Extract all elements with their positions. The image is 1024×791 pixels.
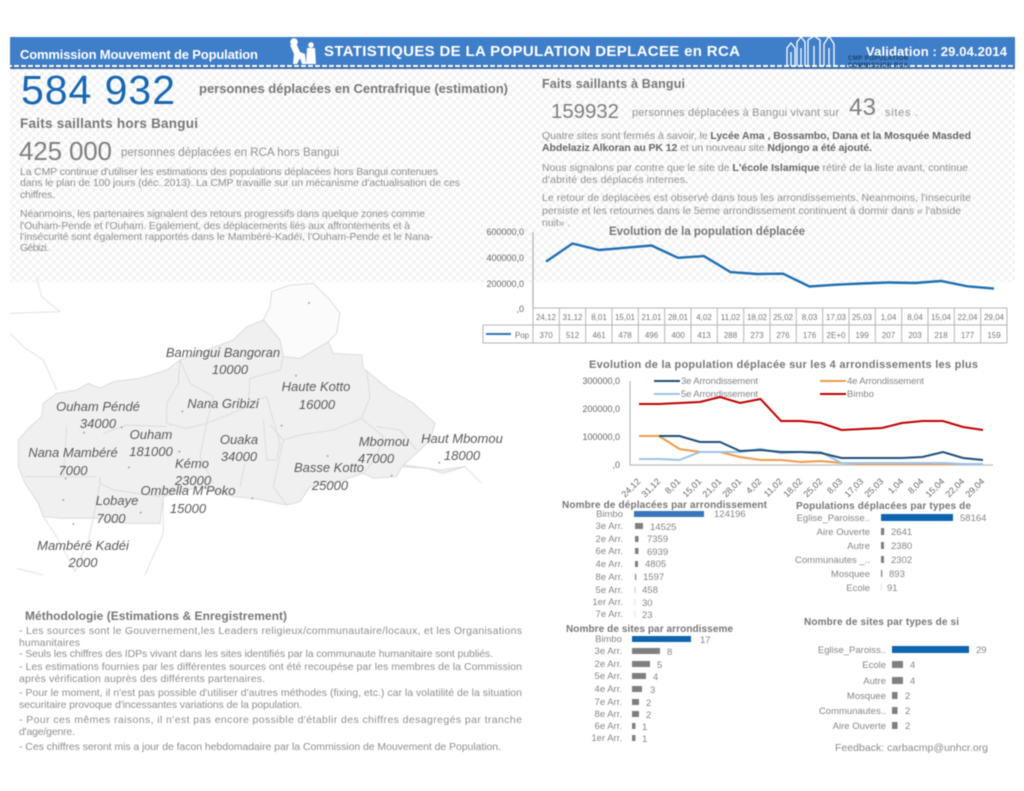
small logo caption xyxy=(848,56,909,69)
labels: 7359 xyxy=(647,534,668,545)
body text xyxy=(20,166,460,254)
date axis labels: 8,04 xyxy=(906,476,925,496)
map labels: 34000 xyxy=(80,416,117,431)
map labels: 16000 xyxy=(299,397,336,412)
bar chart: déplacées par arrondissement xyxy=(562,500,768,621)
labels: Ecole xyxy=(846,583,870,594)
body text: - Pour le moment, il n'est pas possible d'utiliser d'autres méthodes (fixing, etc.) car la volatilité de la situation xyxy=(19,687,522,699)
labels: 17 xyxy=(700,635,711,646)
date axis labels: 1,04 xyxy=(886,476,905,496)
map labels: Kémo xyxy=(175,456,209,471)
labels: 91 xyxy=(887,583,898,594)
labels: 1er Arr. xyxy=(592,597,623,608)
labels: 893 xyxy=(889,569,905,580)
labels: Bimbo xyxy=(595,634,622,645)
labels: Eglise_Paroisse.. xyxy=(797,513,870,524)
line: 4e arrondissement xyxy=(639,436,983,464)
labels: 2380 xyxy=(891,541,912,552)
main title: STATISTIQUES DE LA POPULATION DEPLACEE en RCA xyxy=(324,43,740,60)
panel: méthodologie xyxy=(19,609,522,753)
chart title: Evolution de la population déplacée xyxy=(609,226,805,238)
data table: 400 xyxy=(671,331,685,340)
labels: 58164 xyxy=(960,513,986,524)
data table: 28,01 xyxy=(668,313,689,322)
body text xyxy=(542,130,971,229)
map labels: 15000 xyxy=(170,501,207,516)
chart title: Nombre de déplacées par arrondissement xyxy=(562,500,768,511)
map: Central African Republic prefectures xyxy=(10,278,503,575)
heading: Faits saillants à Bangui xyxy=(542,77,685,91)
labels: 2641 xyxy=(891,527,912,538)
body text: - Pour ces mêmes raisons, il n'est pas encore possible d'établir des chiffres desagregés par tranche xyxy=(19,714,522,726)
body text: Quatre sites sont fermés à savoir, le Lycée Ama , Bossambo, Dana et la Mosquée Masded xyxy=(542,130,971,142)
map labels: Ouaka xyxy=(220,432,258,447)
labels: 8 xyxy=(667,647,672,658)
data table: 4,02 xyxy=(696,313,712,322)
labels: 7e Arr. xyxy=(596,609,623,620)
map labels: 7000 xyxy=(97,511,126,526)
bars xyxy=(881,514,953,591)
date axis labels: 17,03 xyxy=(842,476,865,499)
axis labels: 100000,0 xyxy=(582,432,620,442)
body text: après vérification auprès des différents partenaires. xyxy=(19,673,265,685)
labels: 8e Arr. xyxy=(595,709,622,720)
data table: 8,03 xyxy=(802,313,818,322)
date axis labels: 28,01 xyxy=(720,476,743,499)
labels xyxy=(591,634,711,745)
map labels: 2000 xyxy=(68,555,98,570)
data table: 176 xyxy=(803,331,817,340)
axis labels: 200000,0 xyxy=(582,404,620,414)
date axis labels: 25,02 xyxy=(801,476,824,499)
heading: Méthodologie (Estimations & Enregistrement) xyxy=(25,609,287,623)
line: 3e arrondissement xyxy=(659,436,983,460)
labels: 5 xyxy=(657,660,662,671)
map labels: Lobaye xyxy=(96,493,138,508)
bar chart: sites par arrondissement xyxy=(566,624,733,745)
data table: 288 xyxy=(724,331,738,340)
axis labels: 400000,0 xyxy=(486,253,524,263)
legend xyxy=(654,376,924,400)
labels: 4 xyxy=(653,672,658,683)
body text: humanitaires xyxy=(19,637,80,649)
labels: 3e Arr. xyxy=(595,646,622,657)
body text: Gébizi. xyxy=(20,242,49,254)
date axis labels: 8,03 xyxy=(825,476,844,496)
labels: 6e Arr. xyxy=(596,546,623,557)
date axis labels: 15,01 xyxy=(680,476,703,499)
bars xyxy=(632,636,691,741)
chart title: Evolution de la population déplacée sur les 4 arrondissements les plus xyxy=(589,359,978,371)
map shapes xyxy=(10,278,482,575)
labels: 6e Arr. xyxy=(595,721,622,732)
data table: 159 xyxy=(987,331,1001,340)
labels xyxy=(592,509,746,621)
data table: 17,03 xyxy=(826,313,847,322)
map labels: 23000 xyxy=(174,473,212,488)
panel: Bangui xyxy=(542,77,971,229)
legend: 3e Arrondissement xyxy=(681,376,758,387)
data table: 24,12 xyxy=(536,313,557,322)
labels xyxy=(818,645,987,732)
date axis labels: 15,04 xyxy=(923,476,946,499)
legend: 4e Arrondissement xyxy=(847,376,924,387)
labels: Aire Ouverte xyxy=(833,721,886,732)
body text: Le retour de deplacées est observé dans tous les arrondissements. Neanmoins, l'insecurite xyxy=(542,192,971,204)
data table: 8,04 xyxy=(907,313,923,322)
body text: - Les sources sont le Gouvernement,les Leaders religieux/communautaire/locaux, et les Organisations xyxy=(19,625,522,637)
data table: 1,04 xyxy=(881,313,897,322)
body text xyxy=(19,625,522,753)
labels: 1597 xyxy=(643,572,664,583)
data table: 199 xyxy=(855,331,869,340)
data table: 31,12 xyxy=(562,313,583,322)
map labels: Nana Mambéré xyxy=(28,445,118,460)
map labels: 47000 xyxy=(358,451,395,466)
data table: 203 xyxy=(908,331,922,340)
labels: 3e Arr. xyxy=(596,521,623,532)
labels: 7e Arr. xyxy=(595,697,622,708)
body text: Nous signalons par contre que le site de L'école Islamique rétiré de la liste avant, continue xyxy=(542,162,968,174)
icon: family silhouette xyxy=(290,38,316,64)
labels: 2 xyxy=(905,706,910,717)
labels: 2 xyxy=(905,691,910,702)
headline figure xyxy=(21,67,508,113)
validation date: Validation : 29.04.2014 xyxy=(866,44,1008,59)
data table: 25,03 xyxy=(852,313,873,322)
labels: 4e Arr. xyxy=(595,684,622,695)
data table: 478 xyxy=(618,331,632,340)
axis labels xyxy=(582,376,620,470)
map labels: 34000 xyxy=(221,449,258,464)
data table: 218 xyxy=(934,331,948,340)
labels: 1 xyxy=(642,734,647,745)
labels: 23 xyxy=(642,610,653,621)
map labels: Nana Gribizi xyxy=(187,396,260,411)
sites caption: sites . xyxy=(885,107,918,119)
body text: Néanmoins, les partenaires signalent des retours progressifs dans quelque zones comme xyxy=(20,208,425,220)
chart title: Nombre de sites par types de si xyxy=(804,617,959,628)
labels: 2 xyxy=(905,721,910,732)
data table xyxy=(483,308,1007,343)
data table: 29,04 xyxy=(984,313,1005,322)
data table: 413 xyxy=(697,331,711,340)
labels: 14525 xyxy=(650,522,676,533)
body text: dans le plan de 100 jours (déc. 2013). La CMP travaille sur un mécanisme d'actualisation de ces xyxy=(20,177,460,189)
body text: - Les estimations fournies par les différentes sources ont été recoupése par les membres de la Commission xyxy=(19,661,522,673)
date axis labels: 24,12 xyxy=(619,476,642,499)
labels: 2302 xyxy=(891,555,912,566)
data table: 461 xyxy=(592,331,606,340)
body text: securitaire provoque d'incessantes variations de la population. xyxy=(19,699,302,711)
labels: 5e Arr. xyxy=(595,671,622,682)
labels: 29 xyxy=(976,645,987,656)
labels: 4805 xyxy=(645,559,666,570)
data table: 370 xyxy=(539,331,553,340)
chart: evolution de la population déplacée xyxy=(483,226,1007,343)
labels: Communautes.. xyxy=(819,706,886,717)
labels: 4e Arr. xyxy=(596,559,623,570)
data table: 207 xyxy=(882,331,896,340)
labels: Communautes _.. xyxy=(795,555,870,566)
axis labels: 200000,0 xyxy=(486,279,524,289)
labels: 2e Arr. xyxy=(596,534,623,545)
legend: Bimbo xyxy=(847,389,874,400)
header banner xyxy=(10,36,1015,69)
axis labels: ,0 xyxy=(612,460,620,470)
figure caption: personnes déplacées en RCA hors Bangui xyxy=(121,147,339,159)
chart title: Populations déplacées par types de xyxy=(796,501,971,512)
map labels: Ombella M'Poko xyxy=(141,483,235,498)
figure: 425 000 xyxy=(19,136,112,166)
body text: Abdelaziz Alkoran au PK 12 et un nouveau site Ndjongo a été ajouté. xyxy=(542,142,872,154)
data table: 15,01 xyxy=(615,313,636,322)
data table: 15,04 xyxy=(931,313,952,322)
figure caption: personnes déplacées à Bangui vivant sur xyxy=(632,107,839,119)
body text: - Ces chiffres seront mis a jour de facon hebdomadaire par la Commission de Mouvement de Population. xyxy=(19,741,501,753)
data table: 22,04 xyxy=(957,313,978,322)
body text: persiste et les retournes dans le 5eme arrondissement continuent à dormir dans « l'abside xyxy=(542,205,961,217)
labels: Mosquee xyxy=(831,569,870,580)
data line xyxy=(546,244,994,289)
body text: d'abrité des déplacés internes. xyxy=(542,174,688,186)
patterned background xyxy=(10,68,1015,282)
data table: 18,02 xyxy=(747,313,768,322)
labels: Bimbo xyxy=(596,509,623,520)
labels: 458 xyxy=(642,585,658,596)
icon: group of people outline xyxy=(787,36,834,66)
bar chart: populations par types de sites xyxy=(795,501,986,594)
map labels: Ouham Péndé xyxy=(56,399,140,414)
labels: 2 xyxy=(646,698,651,709)
body text: La CMP continue d'utiliser les estimations des populations déplacées hors Bangui contenues xyxy=(20,166,438,178)
labels: 30 xyxy=(642,598,653,609)
date axis labels xyxy=(619,476,986,499)
map labels: 181000 xyxy=(129,444,173,459)
labels: 4 xyxy=(910,676,915,687)
map labels: Haut Mbomou xyxy=(421,431,503,446)
data table: 11,02 xyxy=(721,313,741,322)
body text: d'age/genre. xyxy=(19,726,75,738)
labels: 5e Arr. xyxy=(596,585,623,596)
body text: - Seuls les chiffres des IDPs vivant dans les sites identifiés par la communaute humanitaire sont publiés. xyxy=(19,648,493,660)
date axis labels: 4,02 xyxy=(744,476,763,496)
date axis labels: 11,02 xyxy=(762,476,784,499)
map labels: Bamingui Bangoran xyxy=(166,345,280,360)
labels: 1 xyxy=(642,722,647,733)
data table: 512 xyxy=(566,331,580,340)
labels: Ecole xyxy=(862,660,886,671)
labels: 124196 xyxy=(714,509,746,520)
date axis labels: 31,12 xyxy=(639,476,662,499)
legend: 5e Arrondissement xyxy=(681,389,758,400)
line: Bimbo xyxy=(639,397,983,430)
body text: l'Ouham-Pende et l'Ouham. Egalement, des déplacements liés aux affrontements et à xyxy=(20,220,410,232)
date axis labels: 29,04 xyxy=(963,476,986,499)
labels: 2 xyxy=(646,710,651,721)
labels: 2e Arr. xyxy=(595,659,622,670)
date axis labels: 8,01 xyxy=(663,476,682,496)
headline caption: personnes déplacées en Centrafrique (estimation) xyxy=(199,81,508,96)
date axis labels: 25,03 xyxy=(862,476,885,499)
headline figure: 584 932 xyxy=(21,67,175,113)
bars xyxy=(634,511,704,617)
labels: 1er Arr. xyxy=(591,733,622,744)
data table: 177 xyxy=(961,331,975,340)
date axis labels: 22,04 xyxy=(943,476,966,499)
labels: 8e Arr. xyxy=(596,572,623,583)
line: 5e arrondissement xyxy=(639,449,983,464)
body text: nuit» . xyxy=(542,217,570,229)
labels: Autre xyxy=(863,676,886,687)
labels: Eglise_Paroiss.. xyxy=(818,645,886,656)
data table: 273 xyxy=(750,331,764,340)
date axis labels: 21,01 xyxy=(700,476,723,499)
data table: 25,02 xyxy=(773,313,794,322)
axis labels: 600000,0 xyxy=(486,227,524,237)
Bangui figure: 159932 xyxy=(551,100,619,123)
labels: Autre xyxy=(847,541,870,552)
bars xyxy=(892,646,969,729)
map labels: 10000 xyxy=(212,362,249,377)
sites figure: 43 xyxy=(849,94,876,121)
map labels xyxy=(28,345,503,570)
small logo caption: COMMISSION RCA xyxy=(848,63,909,69)
chart: 4 arrondissements xyxy=(582,359,993,499)
labels: Mosquee xyxy=(847,691,886,702)
body text: l'insécurité sont également rapportés dans le Mambéré-Kadéï, l'Ouham-Pende et le Nana- xyxy=(20,231,434,243)
axis labels: 300000,0 xyxy=(582,376,620,386)
data table: 2E+0 xyxy=(827,331,846,340)
data table: 8,01 xyxy=(591,313,607,322)
feedback contact: Feedback: carbacmp@unhcr.org xyxy=(835,742,988,754)
labels: 6939 xyxy=(647,547,668,558)
map labels: 25000 xyxy=(311,478,349,493)
map labels: Basse Kotto xyxy=(294,460,364,475)
body text: chiffres. xyxy=(20,189,55,201)
bar chart: sites par types de sites xyxy=(804,617,987,732)
header left title: Commission Mouvement de Population xyxy=(20,47,258,62)
map labels: Ouham xyxy=(130,427,172,442)
map labels: Mambéré Kadéi xyxy=(37,538,130,553)
small logo caption: CMP POPULATION xyxy=(848,56,908,62)
data table: 21,01 xyxy=(641,313,662,322)
map labels: Haute Kotto xyxy=(282,379,350,394)
panel: hors Bangui xyxy=(19,116,460,254)
axis labels: ,0 xyxy=(516,304,524,314)
data table: Pop xyxy=(515,331,530,340)
labels: 4 xyxy=(910,660,915,671)
labels xyxy=(795,513,986,594)
data table: 496 xyxy=(645,331,659,340)
map labels: 18000 xyxy=(444,448,481,463)
map labels: 7000 xyxy=(59,463,88,478)
date axis labels: 18,02 xyxy=(781,476,804,499)
chart title: Nombre de sites par arrondisseme xyxy=(566,624,733,635)
map labels: Mbomou xyxy=(359,434,409,449)
axis labels xyxy=(486,227,524,314)
data table: 276 xyxy=(776,331,790,340)
labels: Aire Ouverte xyxy=(817,527,870,538)
labels: 3 xyxy=(650,685,655,696)
heading: Faits saillants hors Bangui xyxy=(20,116,198,131)
